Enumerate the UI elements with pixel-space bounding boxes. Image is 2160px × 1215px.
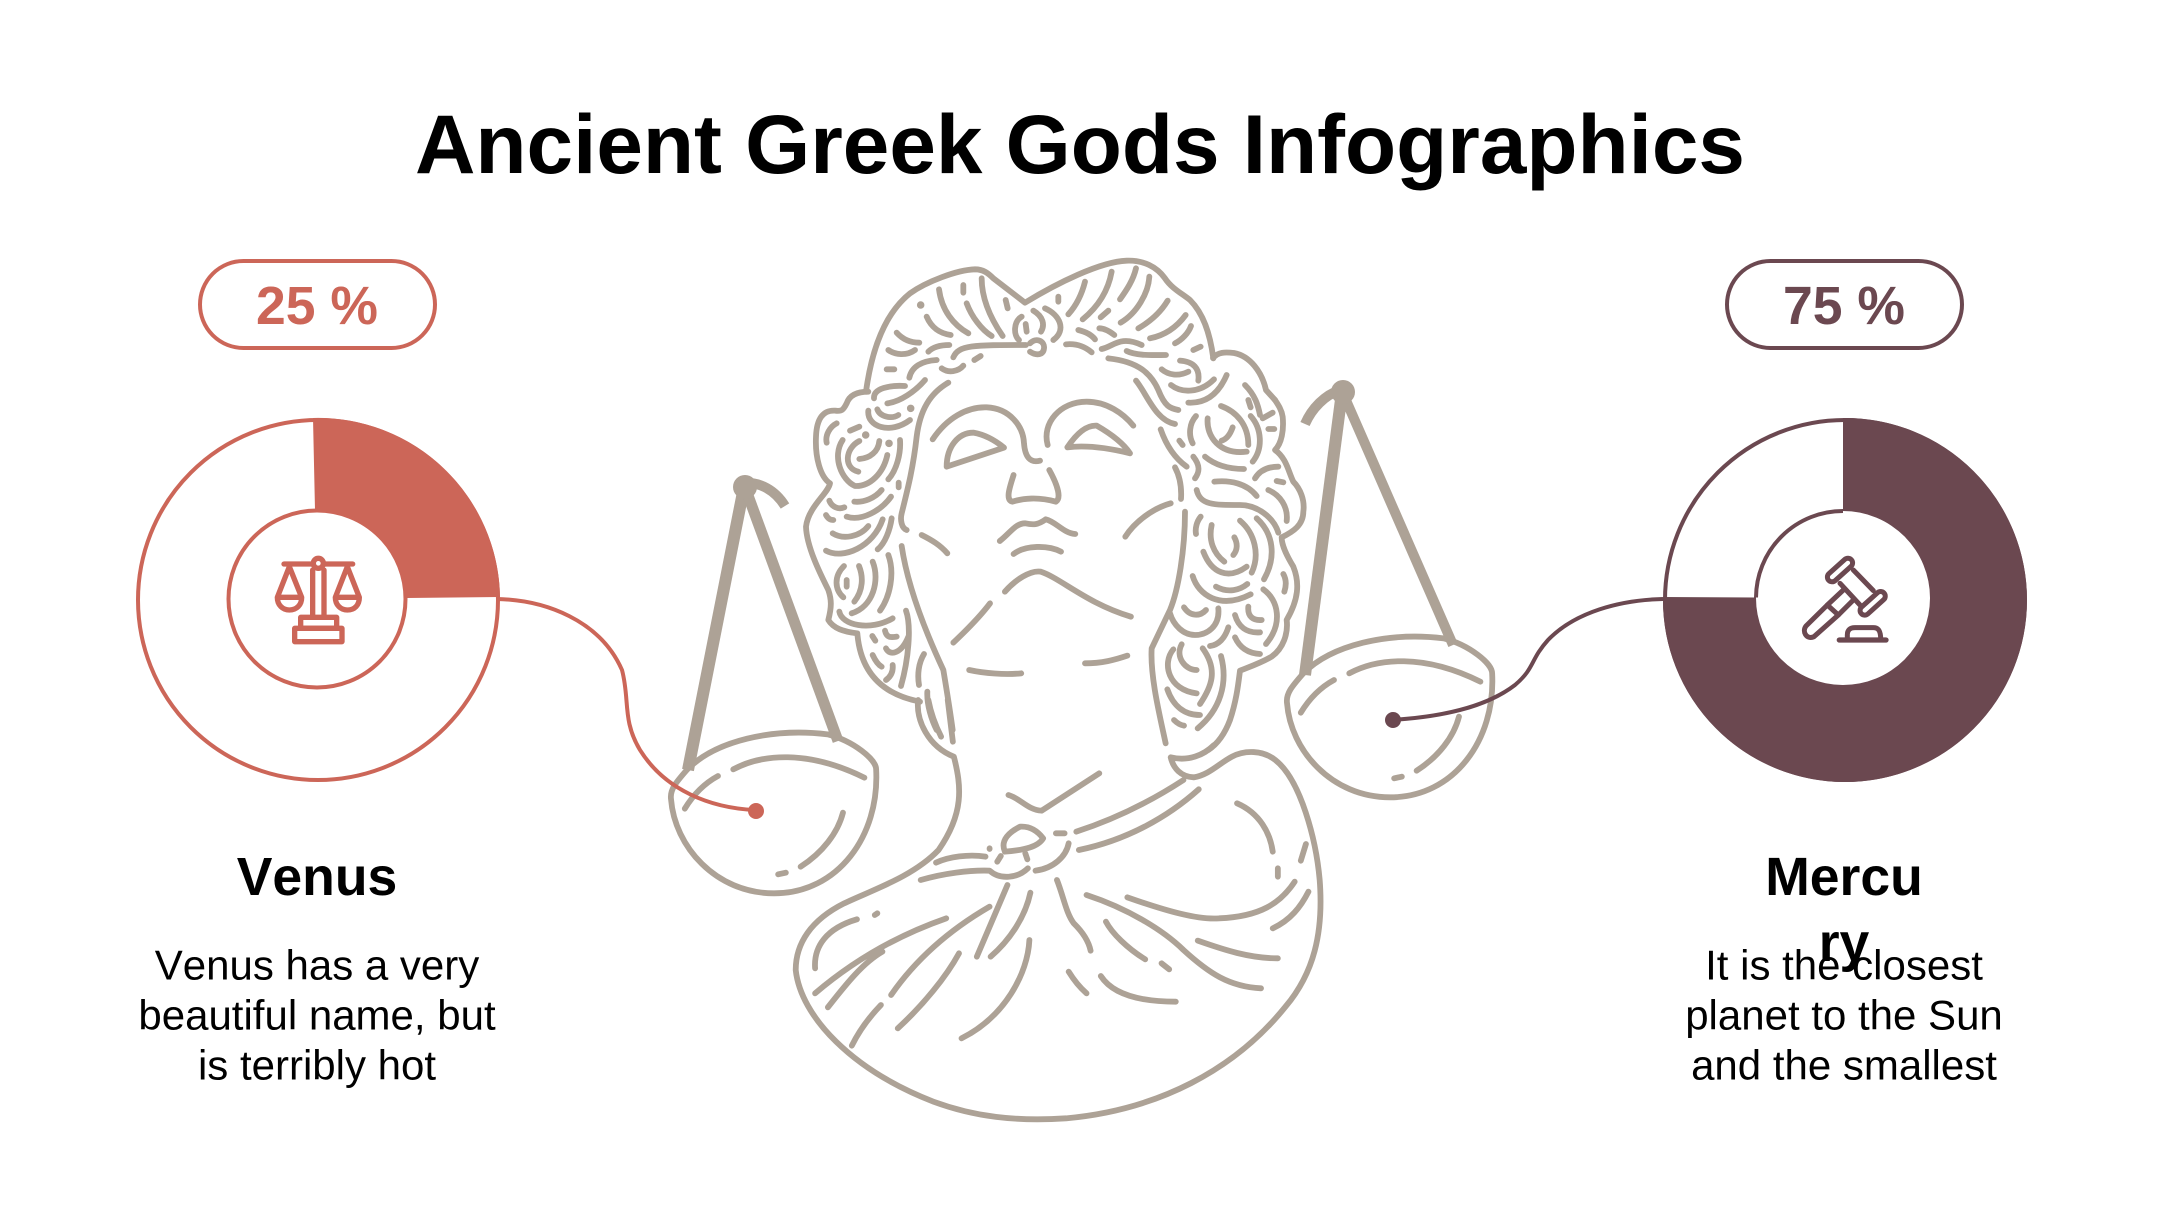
left curls — [806, 380, 990, 730]
description: Venus: is terribly hot — [198, 1042, 436, 1088]
icon: scales of justice — [277, 558, 359, 642]
percentage pill: 75 %: 75 % — [1783, 277, 1905, 336]
description: Mercury: planet to the Sun — [1685, 992, 2003, 1038]
shoulders and drapery — [796, 700, 1321, 1119]
face: nose, lips and chin — [969, 470, 1171, 674]
heading: Mercury: ry — [1819, 914, 1870, 973]
icon: gavel — [1804, 556, 1887, 640]
right upper curl outline — [1213, 353, 1275, 415]
description: Venus: beautiful name, but — [138, 992, 496, 1038]
donut chart: 75 % — [1663, 418, 2027, 782]
title: Ancient Greek Gods Infographics — [415, 97, 1745, 191]
donut chart: 25 % — [138, 418, 500, 780]
percentage pill: 25 %: 25 % — [256, 277, 378, 336]
panel: Venus — [138, 261, 500, 1088]
right balance arm — [1305, 380, 1453, 675]
connector: Mercury — [1385, 599, 1663, 728]
percentage pill: 75 % — [1727, 261, 1962, 348]
top hair and brows — [866, 261, 1227, 467]
left scale pan — [671, 733, 876, 893]
right scale pan — [1287, 637, 1492, 797]
connector: Venus — [497, 599, 764, 819]
illustration: Greek goddess bust with balance scales — [671, 261, 1492, 1119]
heading: Venus: Venus — [237, 848, 397, 907]
left balance arm — [688, 475, 838, 770]
percentage pill: 25 % — [200, 261, 435, 348]
description: Venus: Venus has a very — [155, 942, 479, 988]
panel: Mercury — [1663, 261, 2027, 1088]
description: Mercury: and the smallest — [1691, 1042, 1997, 1088]
heading: Mercury: Mercu — [1765, 848, 1923, 907]
description: Mercury: It is the closest — [1705, 942, 1983, 988]
right curls — [1151, 400, 1304, 750]
